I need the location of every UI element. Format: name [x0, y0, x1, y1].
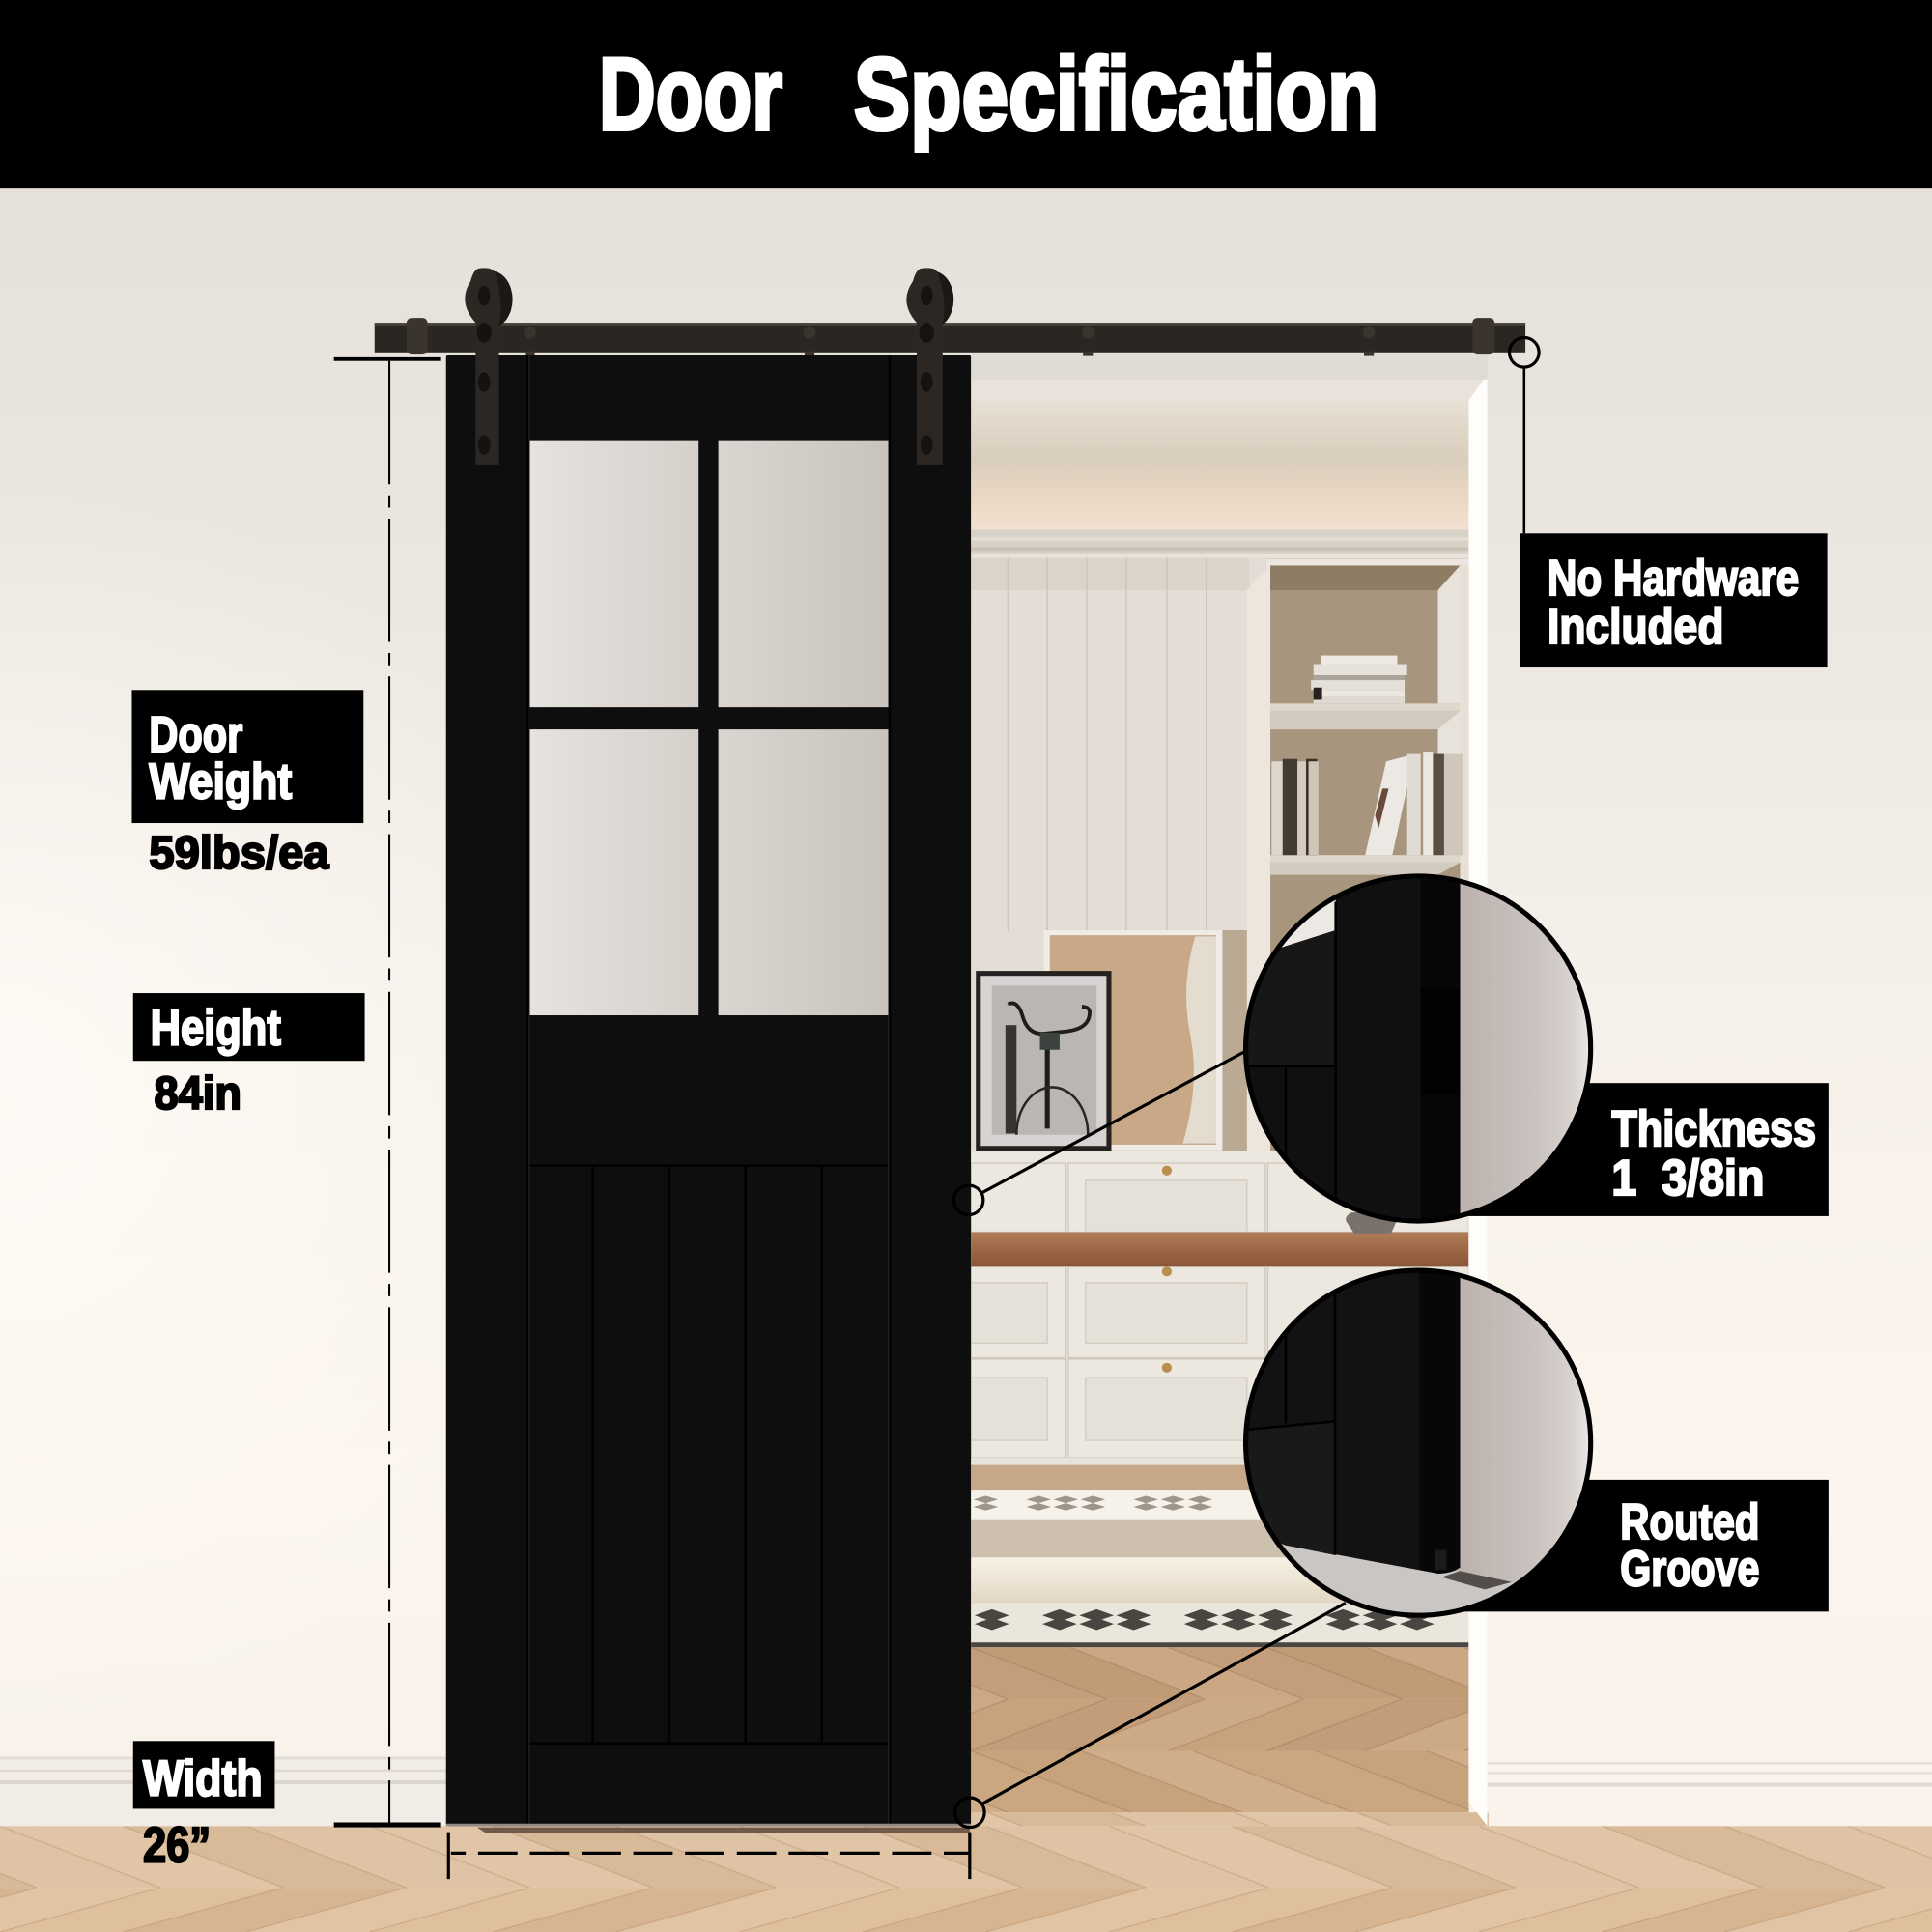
door jamb [1468, 380, 1488, 1826]
callout: no hardware included: No Hardware [1548, 551, 1799, 607]
glass panes [529, 441, 889, 1015]
leader lines to detail circles [953, 1050, 1346, 1828]
callout: thickness: 1 3/8in [1611, 1151, 1765, 1207]
title bar [0, 0, 1932, 188]
barn door track rail [375, 318, 1525, 356]
callout: width: Width [143, 1750, 263, 1806]
detail circle: thickness [1244, 876, 1592, 1224]
callout: door weight: Weight [149, 754, 292, 810]
door seams [527, 355, 890, 1826]
floor foreground [0, 1826, 1932, 1932]
baseboard right [1488, 1761, 1932, 1828]
books: second shelf [1271, 752, 1463, 855]
callout: height [133, 993, 365, 1120]
floor through doorway [971, 1647, 1489, 1826]
title: Specification [854, 36, 1378, 152]
barn door panel [446, 355, 971, 1826]
baseboard left [0, 1756, 446, 1828]
callout: routed groove: Routed [1620, 1494, 1759, 1550]
title: Door [599, 36, 782, 152]
callout: routed groove [1460, 1480, 1829, 1611]
callout: door weight: Door [149, 707, 242, 763]
callout: door weight: 59lbs/ea [149, 827, 330, 879]
callout: width: 26” [143, 1817, 211, 1873]
room floor and rug [971, 1458, 1468, 1647]
callout: no hardware included: Included [1548, 599, 1723, 655]
callout: width [133, 1741, 274, 1873]
callout: door weight [131, 690, 363, 879]
lower cabinets [971, 1151, 1468, 1458]
books: top shelf [1311, 656, 1407, 703]
wooden countertop [971, 1212, 1468, 1266]
crown moulding [971, 529, 1468, 559]
callout: routed groove: Groove [1620, 1542, 1759, 1598]
callout: height: Height [151, 1001, 281, 1057]
callout: no hardware included [1509, 337, 1828, 667]
doorway opening [971, 354, 1489, 1826]
roller hanger left [465, 268, 513, 465]
width dimension line [448, 1833, 970, 1879]
bicycle photo [976, 971, 1112, 1151]
title [599, 36, 1378, 152]
backing wall beside art [1222, 930, 1247, 1152]
rug diamond pattern upper [974, 1495, 1212, 1511]
callout: height: 84in [154, 1067, 242, 1120]
rail bolts [524, 327, 1375, 356]
rail stoppers [407, 318, 1494, 354]
bookshelf [1270, 565, 1468, 1157]
height dimension line [334, 357, 441, 1828]
room interior seen through doorway [971, 401, 1468, 1647]
beige art print [1043, 930, 1222, 1150]
doorway top reveal [971, 354, 1488, 401]
panelled wall [971, 558, 1270, 1155]
callout: thickness: Thickness [1611, 1101, 1816, 1157]
rug diamond pattern lower [975, 1609, 1435, 1631]
callout: thickness [1460, 1083, 1829, 1216]
detail circle: routed groove [1244, 1270, 1592, 1618]
roller hanger right [906, 268, 953, 465]
